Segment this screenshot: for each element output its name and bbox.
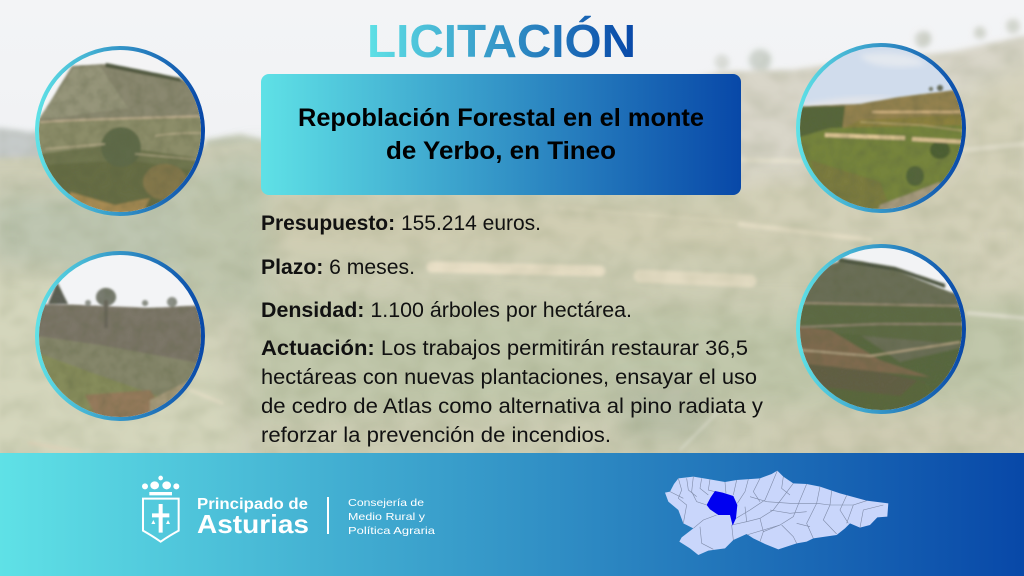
heading: de Yerbo, en Tineo — [386, 137, 616, 165]
text block: key data — [261, 212, 764, 447]
wordmark: Principado de — [197, 496, 308, 513]
action: reforzar la prevención de incendios. — [261, 424, 611, 447]
logo: Principado de Asturias — [142, 476, 435, 542]
panel: headline — [261, 74, 741, 195]
term: Plazo: 6 meses. — [261, 256, 415, 279]
action: hectáreas con nuevas plantaciones, ensayar el uso — [261, 366, 757, 389]
heading — [298, 104, 704, 165]
department name: Política Agraria — [348, 525, 435, 537]
photo: bottom right terraces — [790, 246, 972, 420]
budget: Presupuesto: 155.214 euros. — [261, 212, 541, 235]
action — [261, 337, 764, 447]
icon: crown and shield — [142, 476, 179, 542]
action: Actuación: Los trabajos permitirán restaurar 36,5 — [261, 337, 748, 360]
photo: top right terraces — [790, 45, 972, 220]
title: LICITACIÓN — [367, 15, 636, 67]
department name: Medio Rural y — [348, 511, 426, 523]
department name: Consejería de — [348, 497, 424, 509]
action: de cedro de Atlas como alternativa al pino radiata y — [261, 395, 764, 418]
photo: top left hillside — [30, 48, 210, 220]
map: Asturias with Tineo highlighted — [665, 471, 888, 555]
density: Densidad: 1.100 árboles por hectárea. — [261, 299, 632, 322]
logo: Principado de Asturias: Asturias — [197, 509, 309, 539]
heading: Repoblación Forestal en el monte — [298, 104, 704, 132]
footer band — [0, 453, 1024, 576]
department name — [348, 497, 435, 537]
photo: bottom left slope — [30, 253, 210, 425]
